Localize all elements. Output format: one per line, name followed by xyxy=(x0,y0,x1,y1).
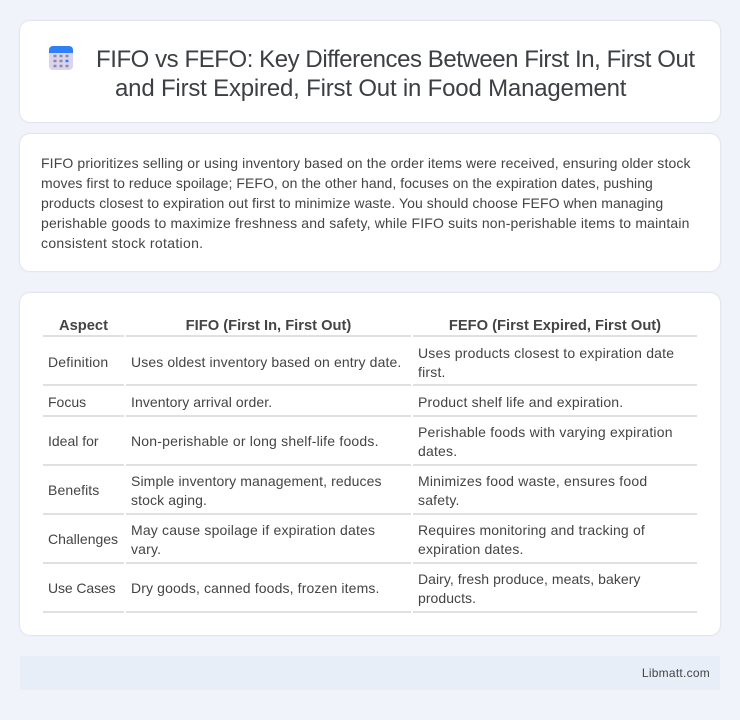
table rows: Simple inventory management, reduces xyxy=(131,473,382,489)
table header: Aspect xyxy=(59,318,108,334)
intro text: FIFO prioritizes selling or using inventory based on the order items were received, ensuring older stock xyxy=(41,155,691,171)
icon: calendar xyxy=(49,46,73,70)
table rows: Minimizes food waste, ensures food xyxy=(418,473,647,489)
intro text: consistent stock rotation. xyxy=(41,235,203,251)
table rows: Uses oldest inventory based on entry date. xyxy=(131,354,401,370)
table rows: Perishable foods with varying expiration xyxy=(418,424,673,440)
title: and First Expired, First Out in Food Management xyxy=(115,75,626,102)
table rows: Challenges xyxy=(48,531,118,547)
table rows: dates. xyxy=(418,443,457,459)
comparison table panel xyxy=(20,293,720,635)
table rows: expiration dates. xyxy=(418,541,524,557)
table rows: Dry goods, canned foods, frozen items. xyxy=(131,580,380,596)
header panel xyxy=(20,21,720,122)
table rows: Requires monitoring and tracking of xyxy=(418,522,645,538)
table rows: May cause spoilage if expiration dates xyxy=(131,522,375,538)
table header: FIFO (First In, First Out) xyxy=(186,318,351,334)
table rows: Ideal for xyxy=(48,433,99,449)
footer text: Libmatt.com xyxy=(642,666,710,680)
intro text: moves first to reduce spoilage; FEFO, on the other hand, focuses on the expiration dates, pushing xyxy=(41,175,653,191)
title xyxy=(96,46,695,102)
table rows: Inventory arrival order. xyxy=(131,394,272,410)
intro text: perishable goods to maximize freshness and safety, while FIFO suits non-perishable items to maintain xyxy=(41,215,690,231)
table rows xyxy=(43,335,697,613)
table rows: Definition xyxy=(48,354,108,370)
table rows: safety. xyxy=(418,492,460,508)
title: FIFO vs FEFO: Key Differences Between First In, First Out xyxy=(96,46,695,73)
table rows: Non-perishable or long shelf-life foods. xyxy=(131,433,379,449)
intro paragraph panel xyxy=(20,134,720,271)
table header xyxy=(59,318,661,334)
footer bar xyxy=(20,656,720,690)
table rows: vary. xyxy=(131,541,161,557)
table rows: first. xyxy=(418,364,446,380)
intro text xyxy=(41,155,691,251)
table rows: Benefits xyxy=(48,482,99,498)
table rows: Dairy, fresh produce, meats, bakery xyxy=(418,571,640,587)
table rows: Focus xyxy=(48,394,86,410)
intro text: products closest to expiration out first to minimize waste. You should choose FEFO when managing xyxy=(41,195,663,211)
table rows: stock aging. xyxy=(131,492,207,508)
table header: FEFO (First Expired, First Out) xyxy=(449,318,661,334)
table rows: Use Cases xyxy=(48,580,116,596)
table rows: products. xyxy=(418,590,476,606)
table rows: Product shelf life and expiration. xyxy=(418,394,623,410)
table rows: Uses products closest to expiration date xyxy=(418,345,674,361)
